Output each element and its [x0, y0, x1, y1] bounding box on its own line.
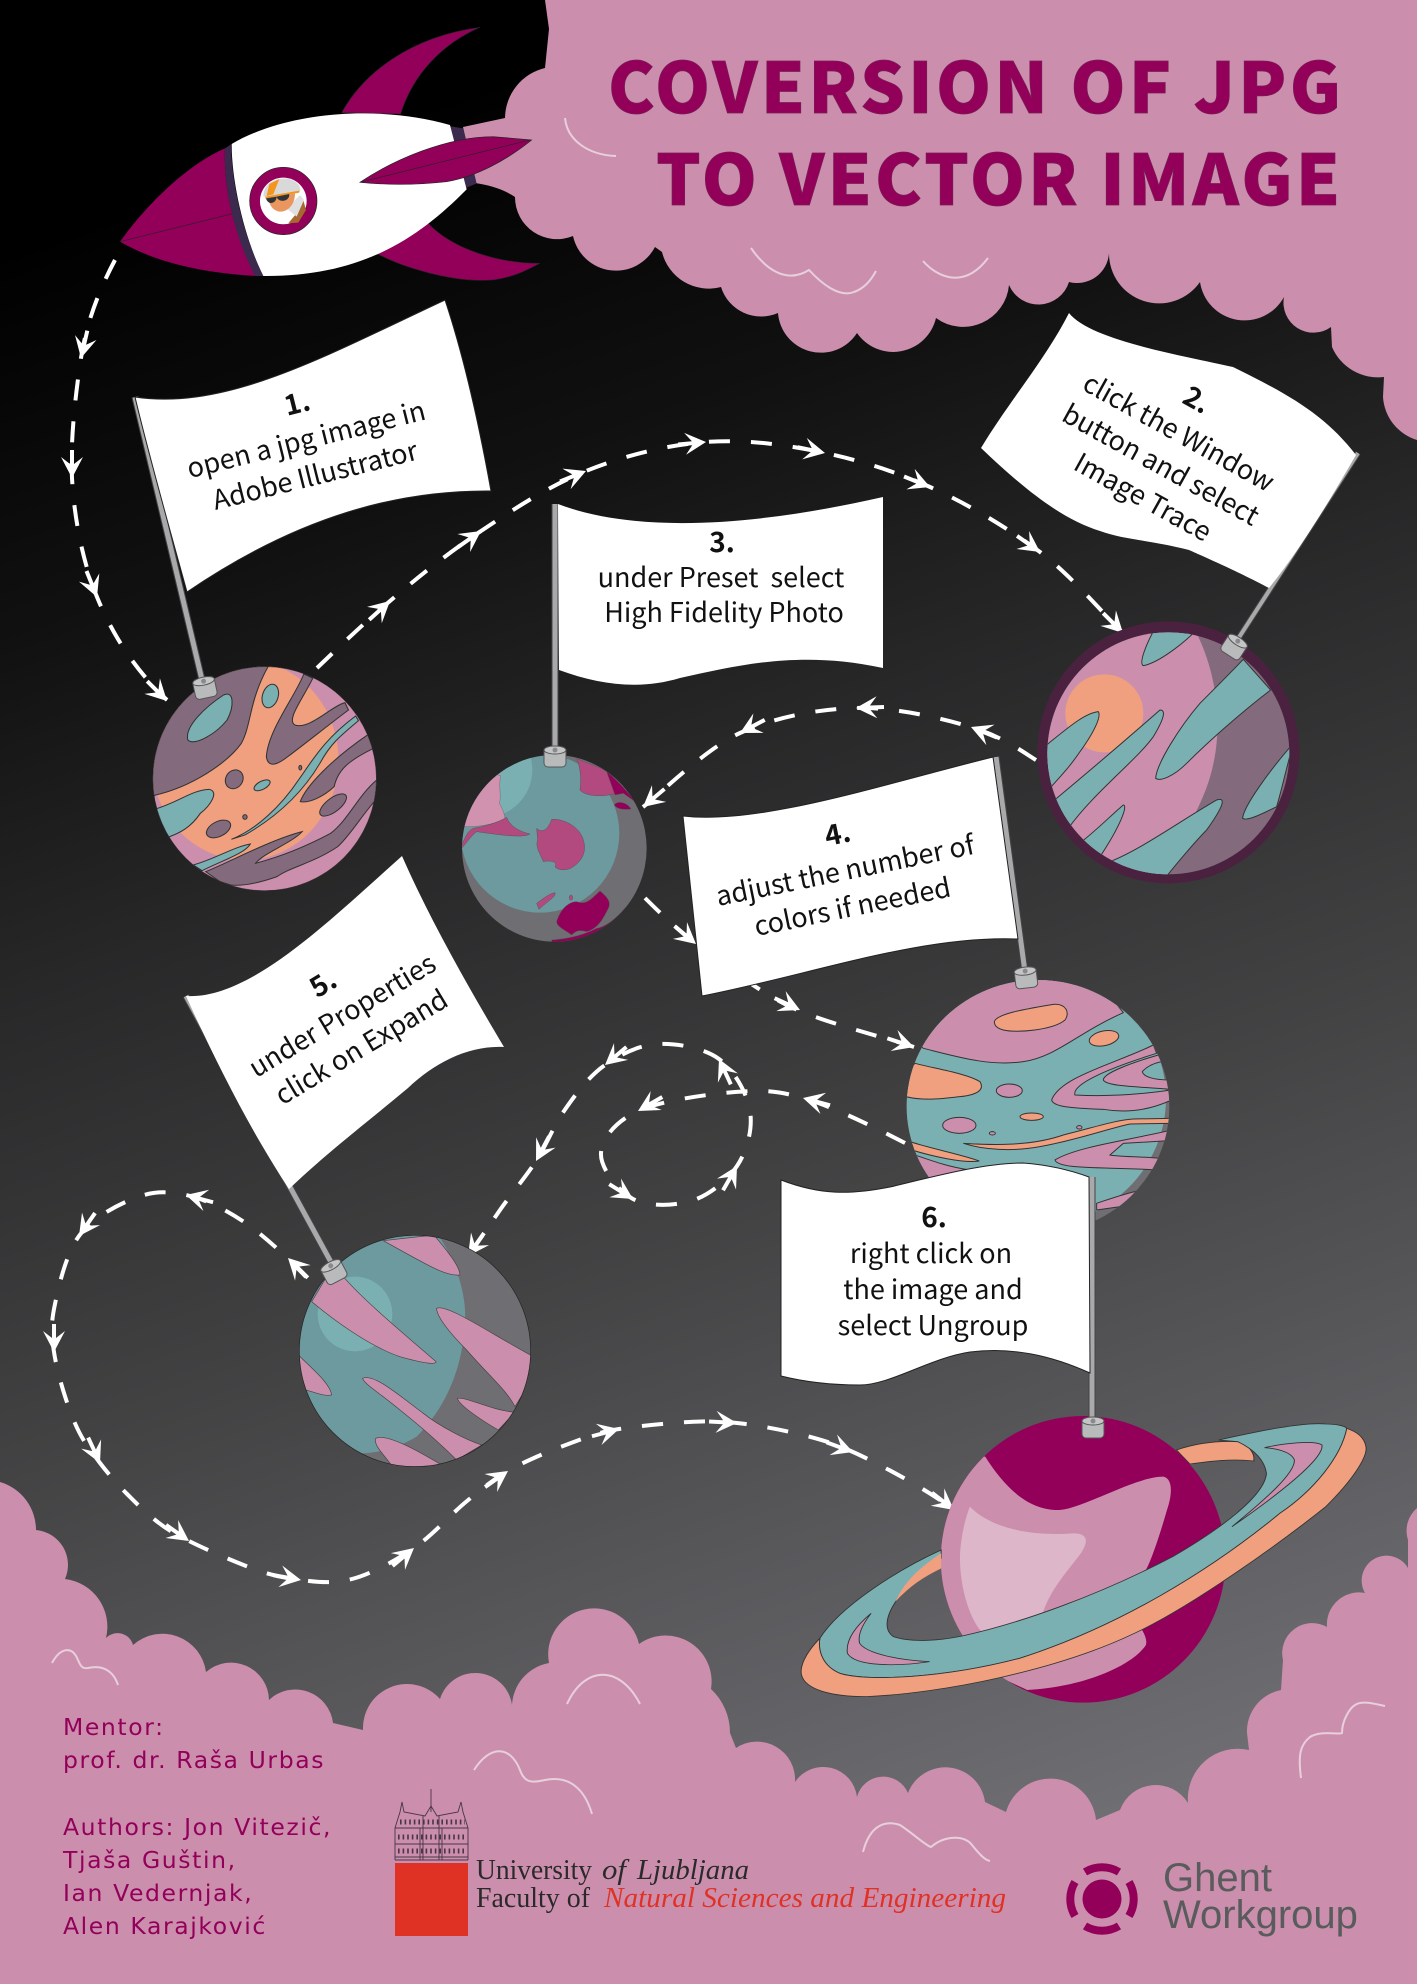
flag 6 cap: [1082, 1417, 1104, 1438]
logo text: Natural Sciences and Engineering: [603, 1883, 1006, 1914]
flag 3 pole: [552, 504, 558, 750]
dashed route: planet 4 loop to planet 5: [459, 1039, 905, 1262]
flag 1 text: open a jpg image in: [182, 389, 429, 486]
rocket nozzle: [448, 126, 477, 188]
logo text: of: [602, 1855, 630, 1886]
planet body: [941, 1416, 1224, 1703]
flag 6 text: right click on: [850, 1232, 1012, 1271]
flag 6 text: 6.: [921, 1196, 947, 1236]
flag 1 cloth: [135, 300, 491, 592]
logo building: [395, 1789, 468, 1860]
flag 2 text: [1038, 328, 1303, 566]
rocket nose: [120, 144, 263, 276]
flag 5 text: click on Expand: [266, 978, 454, 1113]
flag 5 text: [221, 911, 461, 1117]
flag 4 pole: [996, 757, 1025, 972]
flag 2 text: click the Window: [1077, 362, 1283, 499]
ring back: [1177, 1441, 1254, 1464]
planet 3: [1033, 620, 1299, 883]
authors: [62, 1813, 332, 1940]
flag 4 cloth: [683, 757, 1018, 996]
flag 1 text: [173, 353, 438, 522]
flag 5 cloth: [186, 856, 504, 1189]
dashed route: planet 1 to planet 2: [317, 431, 1131, 668]
flag 6 text: select Ungroup: [838, 1304, 1028, 1343]
flag 5 cap: [319, 1257, 348, 1286]
flag 2 text: 2.: [1177, 375, 1218, 422]
flag 5 text: 5.: [301, 959, 344, 1006]
flag 3 text: High Fidelity Photo: [604, 591, 844, 630]
flag 1 text: Adobe Illustrator: [208, 429, 422, 518]
flag 3 cloth: [558, 497, 883, 685]
title: TO VECTOR IMAGE: [656, 125, 1340, 226]
flag 3: [544, 497, 883, 767]
flag 5 pole: [186, 996, 332, 1264]
porthole with pilot: [250, 167, 317, 235]
flag 2 cloth: [981, 313, 1356, 588]
flag 5: [186, 856, 504, 1286]
flag 3 cap: [544, 746, 566, 767]
saturn planet: [801, 1413, 1366, 1707]
mentor: [63, 1713, 325, 1774]
flag 2 text: Image Trace: [1068, 442, 1220, 549]
flag 4 text: [705, 787, 986, 950]
flag 2 text: button and select: [1056, 393, 1267, 533]
mentor: Mentor:: [63, 1713, 165, 1741]
flag 3 text: under Preset select: [598, 556, 844, 595]
logo text: Ljubljana: [636, 1855, 749, 1886]
flag 1 pole: [135, 397, 202, 680]
flag 5 text: under Properties: [240, 942, 442, 1085]
planet 5: [290, 1233, 533, 1470]
dashed route: planet 5 to saturn: [43, 1184, 961, 1591]
planet 1: [152, 666, 376, 891]
planet 2: [462, 756, 647, 942]
bottom cloud panel: [0, 1482, 1417, 1984]
cloud doodles: [565, 118, 988, 293]
authors: Tjaša Guštin,: [62, 1846, 237, 1874]
flag 4: [683, 757, 1038, 996]
rocket body: [232, 113, 467, 276]
flag 6 pole: [1088, 1177, 1096, 1422]
cloud doodles bottom: [52, 1650, 1385, 1861]
ring orange sliver: [896, 1553, 941, 1602]
university logo: [395, 1789, 1006, 1936]
credits text: [62, 1713, 332, 1940]
ghent text: Workgroup: [1163, 1893, 1358, 1937]
ring pink slivers: [847, 1442, 1322, 1665]
flag 2: [981, 313, 1358, 661]
ring orange band: [801, 1428, 1366, 1697]
flag 6: [781, 1163, 1104, 1438]
flag 4 text: 4.: [821, 811, 854, 855]
flag 3 text: [598, 521, 844, 630]
planet 4: [906, 980, 1170, 1220]
ghent workgroup logo: [1070, 1856, 1358, 1937]
logo text: [476, 1855, 1006, 1914]
flag 4 text: adjust the number of: [712, 823, 979, 914]
ghent icon: [1070, 1867, 1134, 1931]
flag 6 text: the image and: [843, 1268, 1023, 1307]
dashed route: planet 2 to planet 3: [636, 696, 1036, 815]
dashed route: rocket to planet 1: [61, 260, 175, 709]
mentor: prof. dr. Raša Urbas: [63, 1746, 325, 1774]
flag 1 text: 1.: [280, 380, 314, 425]
flag 2 cap: [1219, 632, 1249, 661]
authors: Authors: Jon Vitezič,: [63, 1813, 332, 1841]
ghent text: [1163, 1856, 1358, 1937]
title: COVERSION OF JPG: [608, 33, 1341, 134]
authors: Alen Karajković: [63, 1912, 267, 1940]
flag 1: [135, 300, 491, 700]
title: [608, 33, 1341, 226]
rocket fins: [342, 27, 540, 280]
logo red square: [395, 1863, 468, 1936]
top cloud panel: [463, 0, 1417, 440]
rocket side fin: [360, 137, 532, 184]
ring teal band: [819, 1424, 1347, 1678]
flag 6 text: [838, 1196, 1028, 1343]
flag 4 text: colors if needed: [750, 866, 954, 944]
logo text: Faculty of: [476, 1883, 590, 1914]
flag 6 cloth: [781, 1163, 1090, 1385]
dashed route: planet 3 to planet 4: [645, 898, 917, 1057]
flag 1 cap: [192, 675, 218, 700]
ghent text: Ghent: [1163, 1856, 1272, 1900]
rocket: [120, 27, 540, 280]
flag 4 cap: [1014, 966, 1038, 989]
flag 2 pole: [1236, 453, 1358, 642]
flag 3 text: 3.: [709, 521, 735, 561]
logo text: University: [476, 1855, 593, 1886]
authors: Ian Vedernjak,: [63, 1879, 253, 1907]
